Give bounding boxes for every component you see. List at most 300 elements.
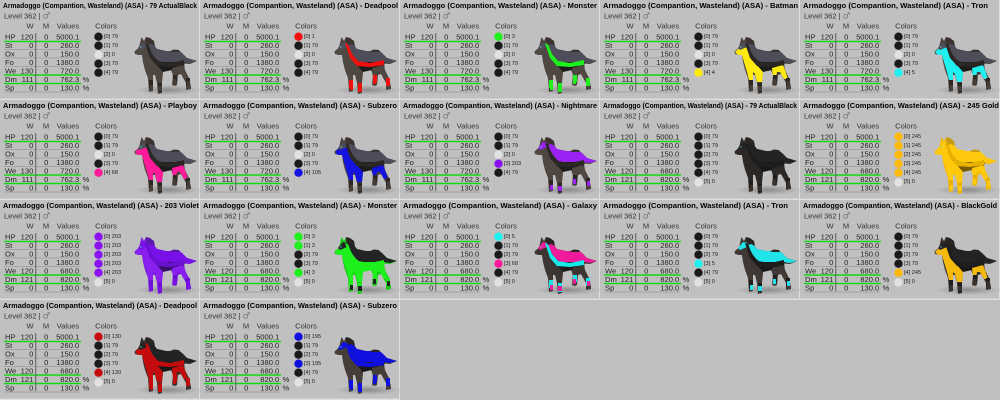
panel: BlackGold, row 3 xyxy=(800,200,1000,300)
color swatches: [4] 245 xyxy=(904,170,921,176)
stats table: Ox xyxy=(5,250,15,258)
stats table: W xyxy=(826,122,834,130)
color swatches xyxy=(494,32,518,77)
stats table: Sp xyxy=(405,84,414,92)
stats table: 0 xyxy=(844,141,848,150)
stats table: 120 xyxy=(421,232,433,242)
stats table: Ox xyxy=(605,50,615,58)
title: Armadoggo (Compantion, Wasteland) (ASA) - Nightmare xyxy=(403,103,597,110)
stats table: 0 xyxy=(44,166,48,176)
stats table: Fo xyxy=(605,158,614,167)
stats table: M xyxy=(243,122,249,130)
color swatches: [5] 0 xyxy=(704,279,715,285)
stats table: 0 xyxy=(444,241,448,250)
stats table: 260.0 xyxy=(60,341,79,350)
color swatches xyxy=(94,232,121,287)
stats table: Ox xyxy=(805,250,815,258)
stats table: 0 xyxy=(229,250,233,258)
stats table: 0 xyxy=(844,50,848,58)
stats table: We xyxy=(205,166,216,176)
stats table: W xyxy=(626,122,634,130)
stats table: Colors xyxy=(295,22,317,30)
stats table: 130.0 xyxy=(660,284,679,292)
panel: 79 ActualBlack, row 2 xyxy=(600,100,800,200)
stats table: Sp xyxy=(205,84,214,92)
stats table: 0 xyxy=(844,132,848,142)
stats table: 0 xyxy=(844,175,848,184)
stats table: 120 xyxy=(21,266,33,276)
stats table: Sp xyxy=(5,384,14,392)
stats table: 0 xyxy=(444,275,448,284)
stats table: 0 xyxy=(244,141,248,150)
color swatches: [3] 68 xyxy=(504,261,518,267)
stats table: 680.0 xyxy=(660,266,679,276)
stats table: 120 xyxy=(621,166,633,176)
stats table: Values xyxy=(57,122,79,130)
stats table: Fo xyxy=(405,258,414,267)
stats table: 0 xyxy=(644,150,648,158)
stats table: 120 xyxy=(421,32,433,42)
stats table: 5000.1 xyxy=(656,232,679,242)
color swatches: [2] 79 xyxy=(104,352,118,358)
stats table: 0 xyxy=(44,158,48,167)
stats table: 0 xyxy=(229,84,233,92)
stats table: 0 xyxy=(629,84,633,92)
stats table: 0 xyxy=(429,141,433,150)
stats table: % xyxy=(82,284,90,292)
stats table: W xyxy=(626,22,634,30)
stats table: Values xyxy=(457,222,479,230)
stats table: 0 xyxy=(29,384,33,392)
stats table: 0 xyxy=(229,50,233,58)
stats table: 0 xyxy=(229,141,233,150)
stats table: HP xyxy=(205,332,216,342)
color swatches: [5] 0 xyxy=(104,279,115,285)
stats table: 0 xyxy=(44,184,48,192)
stats table: Fo xyxy=(205,358,214,367)
color swatches: [0] 79 xyxy=(904,34,918,40)
stats table: 0 xyxy=(44,66,48,76)
stats table: 150.0 xyxy=(660,150,679,158)
stats table: HP xyxy=(805,132,816,142)
stats table: 0 xyxy=(429,41,433,50)
title: Armadoggo (Compantion, Wasteland) (ASA) - 245 Gold xyxy=(803,103,999,110)
color swatches xyxy=(894,32,918,77)
stats table: 1380.0 xyxy=(56,158,79,167)
stats table: % xyxy=(882,84,890,92)
stats table: 0 xyxy=(629,58,633,67)
stats table: St xyxy=(605,41,613,50)
stats table: 5000.1 xyxy=(56,32,79,42)
stats table: 0 xyxy=(644,241,648,250)
icon: dog xyxy=(934,137,1000,195)
stats table: 820.0 xyxy=(60,375,79,384)
stats table: Sp xyxy=(405,284,414,292)
stats table: 5000.1 xyxy=(856,32,879,42)
stats table: 820.0 xyxy=(460,275,479,284)
stats table: Values xyxy=(857,222,879,230)
icon: dog xyxy=(734,237,800,295)
stats table: 5000.1 xyxy=(256,232,279,242)
stats table: St xyxy=(405,41,413,50)
stats table: 260.0 xyxy=(60,141,79,150)
level: Level 362 | ♂ xyxy=(404,12,451,22)
stats table: 0 xyxy=(244,384,248,392)
stats table: 0 xyxy=(44,275,48,284)
color swatches xyxy=(694,132,718,187)
stats table: Sp xyxy=(605,84,614,92)
stats table: 0 xyxy=(29,341,33,350)
stats table: 720.0 xyxy=(60,66,79,76)
color swatches: [1] 79 xyxy=(904,43,918,49)
stats table: 0 xyxy=(244,358,248,367)
stats table: 720.0 xyxy=(260,166,279,176)
stats table: 720.0 xyxy=(660,66,679,76)
stats table: Ox xyxy=(405,150,415,158)
color swatches: [5] 0 xyxy=(104,379,115,385)
stats table: 121 xyxy=(21,275,33,284)
stats table: M xyxy=(243,222,249,230)
icon: dog xyxy=(734,37,800,95)
color swatches: [3] 79 xyxy=(304,61,318,67)
color swatches: [0] 79 xyxy=(304,134,318,140)
stats table: HP xyxy=(5,332,16,342)
stats table: Dm xyxy=(205,375,217,384)
stats table: 0 xyxy=(229,58,233,67)
stats table: 260.0 xyxy=(260,241,279,250)
stats table: 0 xyxy=(44,41,48,50)
stats table: 1380.0 xyxy=(856,258,879,267)
stats table: 0 xyxy=(429,84,433,92)
stats table: 111 xyxy=(422,175,433,184)
stats table: 0 xyxy=(829,158,833,167)
stats table: M xyxy=(443,22,449,30)
stats table: 0 xyxy=(629,150,633,158)
stats table: 1380.0 xyxy=(56,58,79,67)
stats table: We xyxy=(5,366,16,376)
color swatches xyxy=(494,132,521,177)
icon: dog xyxy=(334,337,400,395)
title: Armadoggo (Compantion, Wasteland) (ASA) - Tron xyxy=(803,3,988,10)
stats table: Colors xyxy=(895,22,917,30)
stats table: 1380.0 xyxy=(256,258,279,267)
color swatches: [0] 79 xyxy=(104,134,118,140)
stats table: 0 xyxy=(844,166,848,176)
stats table: Colors xyxy=(495,222,517,230)
stats table: % xyxy=(482,75,490,84)
stats table: We xyxy=(5,166,16,176)
stats table: Colors xyxy=(695,222,717,230)
stats table: 130.0 xyxy=(860,184,879,192)
stats table: 720.0 xyxy=(260,66,279,76)
stats table: Colors xyxy=(95,222,117,230)
stats table: 0 xyxy=(44,384,48,392)
stats table: 0 xyxy=(844,250,848,258)
icon: dog xyxy=(334,237,400,295)
stats table: 680.0 xyxy=(660,166,679,176)
stats table: 1380.0 xyxy=(656,58,679,67)
stats table: 0 xyxy=(644,158,648,167)
stats table: Ox xyxy=(205,50,215,58)
stats table: Sp xyxy=(605,184,614,192)
stats table: 0 xyxy=(29,258,33,267)
stats table: 130 xyxy=(421,166,433,176)
stats table: 0 xyxy=(229,258,233,267)
panel: 203 Violet, row 3 xyxy=(0,200,200,300)
stats table: Fo xyxy=(5,158,14,167)
stats table: St xyxy=(405,141,413,150)
panel: Galaxy, row 3 xyxy=(400,200,600,300)
stats table: 121 xyxy=(21,375,33,384)
stats table: 121 xyxy=(221,275,233,284)
color swatches: [1] 79 xyxy=(104,343,118,349)
stats table: M xyxy=(643,22,649,30)
stats table: 150.0 xyxy=(460,50,479,58)
stats table: 130.0 xyxy=(260,284,279,292)
stats table: 0 xyxy=(44,266,48,276)
stats table: We xyxy=(605,66,616,76)
stats table: 150.0 xyxy=(460,250,479,258)
stats table: 0 xyxy=(44,341,48,350)
stats table: We xyxy=(405,266,416,276)
stats table: 0 xyxy=(44,32,48,42)
color swatches: [2] 0 xyxy=(304,152,315,158)
stats table: 0 xyxy=(29,158,33,167)
stats table: % xyxy=(282,375,290,384)
stats table: W xyxy=(426,22,434,30)
stats table: 0 xyxy=(844,58,848,67)
color swatches: [0] 5 xyxy=(504,234,515,240)
stats table: 111 xyxy=(422,75,433,84)
color swatches: [0] 79 xyxy=(504,134,518,140)
stats table: 0 xyxy=(229,184,233,192)
stats table: 820.0 xyxy=(660,175,679,184)
stats table: Dm xyxy=(605,75,617,84)
stats table: % xyxy=(282,84,290,92)
stats table: Colors xyxy=(695,22,717,30)
stats table: 150.0 xyxy=(60,150,79,158)
stats table: 0 xyxy=(444,41,448,50)
color swatches: [1] 79 xyxy=(104,143,118,149)
stats table xyxy=(205,222,317,292)
color swatches: [3] 79 xyxy=(904,61,918,67)
stats table: 0 xyxy=(644,284,648,292)
stats table: 260.0 xyxy=(260,341,279,350)
stats table: 0 xyxy=(429,184,433,192)
color swatches: [2] 79 xyxy=(304,352,318,358)
stats table: 0 xyxy=(844,158,848,167)
color swatches: [2] 0 xyxy=(504,52,515,58)
stats table: 820.0 xyxy=(860,175,879,184)
stats table: We xyxy=(5,66,16,76)
panel: Subzero, row 2 xyxy=(200,100,400,200)
stats table: 0 xyxy=(629,184,633,192)
stats table: % xyxy=(682,75,690,84)
stats table: 0 xyxy=(229,384,233,392)
stats table: 0 xyxy=(44,241,48,250)
panel: 79 ActualBlack, row 1 xyxy=(0,0,200,100)
stats table: % xyxy=(282,284,290,292)
stats table: 260.0 xyxy=(660,141,679,150)
stats table: 0 xyxy=(829,41,833,50)
stats table: 0 xyxy=(244,84,248,92)
stats table: 130.0 xyxy=(260,84,279,92)
stats table: Values xyxy=(657,22,679,30)
stats table: 0 xyxy=(29,241,33,250)
stats table: M xyxy=(843,122,849,130)
stats table: 120 xyxy=(221,32,233,42)
color swatches: [2] 0 xyxy=(104,152,115,158)
stats table: 121 xyxy=(821,275,833,284)
stats table: 0 xyxy=(229,41,233,50)
stats table: 120 xyxy=(621,32,633,42)
stats table: 0 xyxy=(29,41,33,50)
stats table: 0 xyxy=(44,175,48,184)
stats table: Values xyxy=(657,222,679,230)
color swatches: [3] 203 xyxy=(504,161,521,167)
level: Level 362 | ♂ xyxy=(204,312,251,322)
stats table: HP xyxy=(205,232,216,242)
stats table xyxy=(805,222,917,292)
stats table xyxy=(205,322,317,392)
stats table: % xyxy=(882,75,890,84)
stats table: % xyxy=(682,275,690,284)
color swatches xyxy=(294,232,318,287)
stats table: M xyxy=(43,22,49,30)
stats table: 121 xyxy=(421,275,433,284)
stats table: 0 xyxy=(444,158,448,167)
stats table: HP xyxy=(805,232,816,242)
stats table: 0 xyxy=(444,50,448,58)
stats table: 150.0 xyxy=(260,350,279,358)
stats table: HP xyxy=(205,32,216,42)
title: Armadoggo (Compantion, Wasteland) (ASA) - Subzero xyxy=(203,303,397,310)
stats table: % xyxy=(682,184,690,192)
color swatches: [4] 79 xyxy=(304,70,318,76)
color swatches: [0] 130 xyxy=(104,334,121,340)
stats table: 0 xyxy=(244,250,248,258)
stats table: 150.0 xyxy=(260,150,279,158)
stats table: 0 xyxy=(244,266,248,276)
stats table: We xyxy=(405,166,416,176)
stats table: HP xyxy=(605,32,616,42)
stats table: 0 xyxy=(629,258,633,267)
stats table: 120 xyxy=(21,132,33,142)
stats table: Values xyxy=(57,322,79,330)
stats table: Ox xyxy=(405,50,415,58)
color swatches: [3] 79 xyxy=(104,61,118,67)
color swatches: [0] 3 xyxy=(304,234,315,240)
panel: Monster, row 3 xyxy=(200,200,400,300)
stats table: 0 xyxy=(644,266,648,276)
panel: Nightmare, row 2 xyxy=(400,100,600,200)
stats table: 260.0 xyxy=(860,141,879,150)
stats table: 0 xyxy=(444,84,448,92)
stats table: 120 xyxy=(21,32,33,42)
stats table: 762.3 xyxy=(260,175,279,184)
stats table: We xyxy=(805,266,816,276)
color swatches: [5] 0 xyxy=(304,279,315,285)
stats table: % xyxy=(882,175,890,184)
stats table: 820.0 xyxy=(60,275,79,284)
stats table: 0 xyxy=(629,41,633,50)
stats table: 0 xyxy=(444,266,448,276)
color swatches: [4] 105 xyxy=(304,170,321,176)
stats table: 762.3 xyxy=(860,75,879,84)
stats table: % xyxy=(82,84,90,92)
stats table: 0 xyxy=(844,84,848,92)
stats table: We xyxy=(205,266,216,276)
stats table: 0 xyxy=(829,184,833,192)
stats table: 0 xyxy=(644,166,648,176)
stats table: Dm xyxy=(805,175,817,184)
stats table: 0 xyxy=(444,250,448,258)
color swatches: [1] 79 xyxy=(504,143,518,149)
stats table xyxy=(5,22,117,92)
title: Armadoggo (Compantion, Wasteland) (ASA) - Monster xyxy=(203,203,397,210)
stats table: 130 xyxy=(821,66,833,76)
stats table: 0 xyxy=(44,50,48,58)
stats table: % xyxy=(282,384,290,392)
stats table: 0 xyxy=(244,341,248,350)
stats table: 120 xyxy=(821,232,833,242)
stats table: 0 xyxy=(829,58,833,67)
stats table: Colors xyxy=(495,22,517,30)
icon: dog xyxy=(134,137,200,195)
stats table: 260.0 xyxy=(460,241,479,250)
level: Level 362 | ♂ xyxy=(404,112,451,122)
stats table: 120 xyxy=(821,132,833,142)
title: Armadoggo (Compantion, Wasteland) (ASA) - Playboy xyxy=(3,103,197,110)
stats table: 120 xyxy=(221,132,233,142)
stats table: 0 xyxy=(444,184,448,192)
color swatches: [3] 79 xyxy=(504,61,518,67)
stats table: % xyxy=(882,275,890,284)
stats table: 0 xyxy=(229,158,233,167)
color swatches: [4] 68 xyxy=(104,170,118,176)
stats table: 0 xyxy=(244,175,248,184)
stats table xyxy=(605,22,717,92)
stats table: 260.0 xyxy=(260,41,279,50)
stats table: 720.0 xyxy=(860,66,879,76)
color swatches: [2] 0 xyxy=(704,52,715,58)
stats table: 120 xyxy=(621,232,633,242)
stats table: 0 xyxy=(429,258,433,267)
icon: dog xyxy=(534,237,600,295)
stats table: Sp xyxy=(605,284,614,292)
stats table: 680.0 xyxy=(60,366,79,376)
stats table xyxy=(5,222,117,292)
stats table: 680.0 xyxy=(60,266,79,276)
stats table: M xyxy=(443,222,449,230)
color swatches: [3] 79 xyxy=(704,161,718,167)
title: Armadoggo (Compantion, Wasteland) (ASA) - BlackGold xyxy=(803,203,997,210)
stats table: % xyxy=(682,175,690,184)
stats table: 150.0 xyxy=(860,250,879,258)
stats table: W xyxy=(226,222,234,230)
stats table: 0 xyxy=(844,150,848,158)
stats table: St xyxy=(605,141,613,150)
stats table: 0 xyxy=(244,350,248,358)
level: Level 362 | ♂ xyxy=(4,312,51,322)
stats table: 0 xyxy=(429,150,433,158)
color swatches: [1] 79 xyxy=(504,243,518,249)
color swatches xyxy=(894,132,921,187)
stats table: St xyxy=(5,141,13,150)
stats table: M xyxy=(843,222,849,230)
stats table: 120 xyxy=(21,366,33,376)
stats table: Values xyxy=(257,222,279,230)
